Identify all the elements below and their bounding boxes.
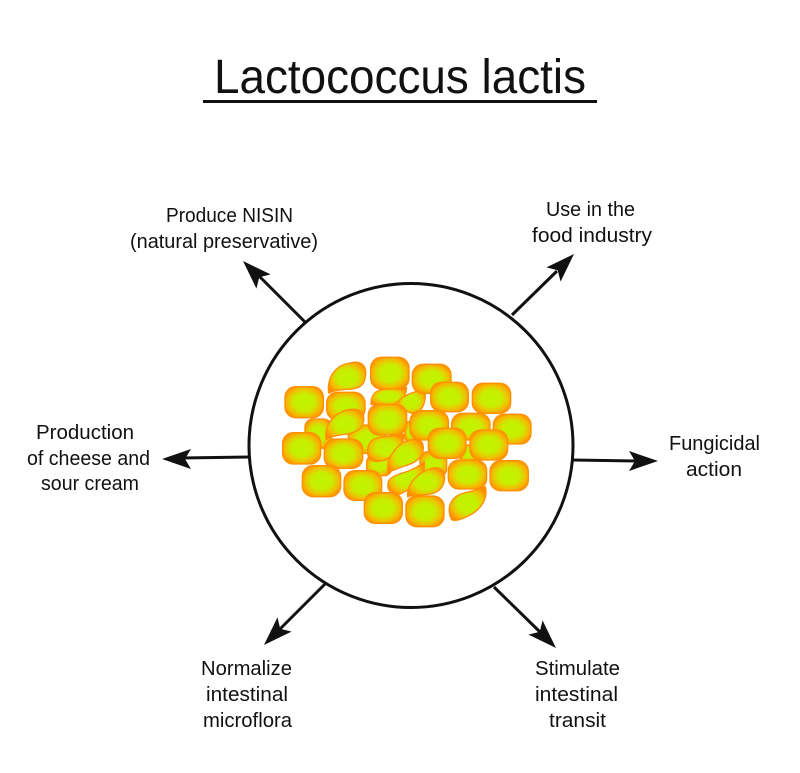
- arrow: west to cheese and sour cream: [162, 449, 249, 469]
- label: food industry: Use in the: [546, 199, 635, 221]
- label: fungicidal action: Fungicidal: [669, 433, 760, 455]
- arrow: south-east to intestinal transit: [494, 587, 563, 655]
- arrow: east to fungicidal action: [573, 451, 658, 471]
- label: produce nisin: (natural preservative): [130, 231, 318, 253]
- label: stimulate transit: intestinal: [535, 684, 618, 706]
- label: food industry: food industry: [532, 225, 652, 247]
- label: produce nisin: [130, 205, 318, 253]
- label: food industry: [532, 199, 652, 247]
- label: normalize microflora: microflora: [203, 710, 293, 732]
- bacteria cluster: [283, 357, 531, 527]
- arrow: south-west to microflora: [257, 584, 325, 652]
- label: cheese and sour cream: of cheese and: [27, 448, 150, 470]
- label: stimulate transit: Stimulate: [535, 658, 620, 680]
- arrow: north-east to food industry: [512, 247, 581, 315]
- label: normalize microflora: intestinal: [206, 684, 288, 706]
- label: fungicidal action: action: [686, 459, 742, 481]
- label: cheese and sour cream: [27, 422, 150, 495]
- central circle: [249, 284, 573, 608]
- label: produce nisin: Produce NISIN: [166, 205, 293, 227]
- label: cheese and sour cream: sour cream: [41, 473, 139, 495]
- label: fungicidal action: [669, 433, 760, 481]
- label: normalize microflora: [201, 658, 293, 732]
- label: cheese and sour cream: Production: [36, 422, 134, 444]
- arrow: north-west to nisin: [236, 254, 305, 322]
- label: stimulate transit: [535, 658, 620, 732]
- title: Lactococcus lactis: [214, 51, 586, 104]
- label: stimulate transit: transit: [549, 710, 606, 732]
- label: normalize microflora: Normalize: [201, 658, 292, 680]
